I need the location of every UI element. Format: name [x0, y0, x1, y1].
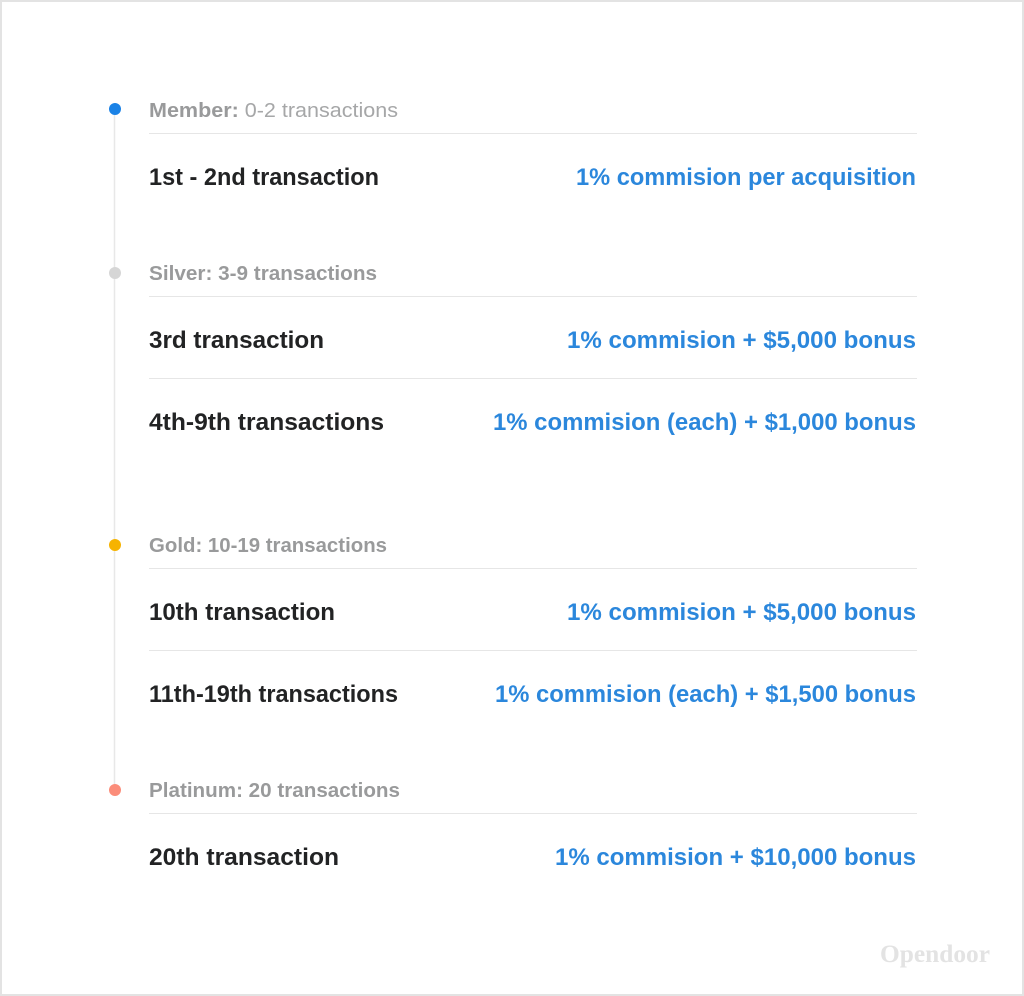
timeline line — [114, 109, 116, 790]
row: 20th transaction — [149, 844, 916, 871]
row: 4th-9th transactions: 1% commision (each) + $1,000 bonus — [493, 409, 916, 436]
icon: platinum dot — [109, 784, 121, 796]
row: 10th transaction: 1% commision + $5,000 bonus — [567, 599, 916, 626]
row: 10th transaction: 10th transaction — [149, 599, 335, 626]
icon: silver dot — [109, 267, 121, 279]
icon: member dot — [109, 103, 121, 115]
icon: gold dot — [109, 539, 121, 551]
row: 1st-2nd transaction — [149, 164, 916, 191]
row: 1st-2nd transaction: 1st - 2nd transaction — [149, 164, 379, 191]
row: 3rd transaction: 1% commision + $5,000 bonus — [567, 327, 916, 354]
row: 3rd transaction — [149, 327, 916, 354]
panel: platinum tier — [149, 780, 917, 871]
row: 11th-19th transactions: 1% commision (each) + $1,500 bonus — [495, 681, 916, 708]
row: 10th transaction — [149, 599, 916, 626]
panel: member tier — [149, 100, 917, 191]
row: 11th-19th transactions: 11th-19th transactions — [149, 681, 398, 708]
row: 4th-9th transactions — [149, 409, 916, 436]
logo: Opendoor: Opendoor — [880, 941, 990, 968]
panel: silver tier — [149, 263, 917, 436]
heading: silver: Silver: 3-9 transactions — [149, 263, 377, 285]
row: 4th-9th transactions: 4th-9th transactions — [149, 409, 384, 436]
heading: member: Member: 0-2 transactions — [149, 100, 398, 122]
panel: gold tier — [149, 535, 917, 708]
row: 20th transaction: 20th transaction — [149, 844, 339, 871]
heading: gold: Gold: 10-19 transactions — [149, 535, 387, 557]
row: 1st-2nd transaction: 1% commision per acquisition — [576, 164, 916, 191]
row: 20th transaction: 1% commision + $10,000 bonus — [555, 844, 916, 871]
row: 11th-19th transactions — [149, 681, 916, 708]
heading: platinum: Platinum: 20 transactions — [149, 780, 400, 802]
row: 3rd transaction: 3rd transaction — [149, 327, 324, 354]
